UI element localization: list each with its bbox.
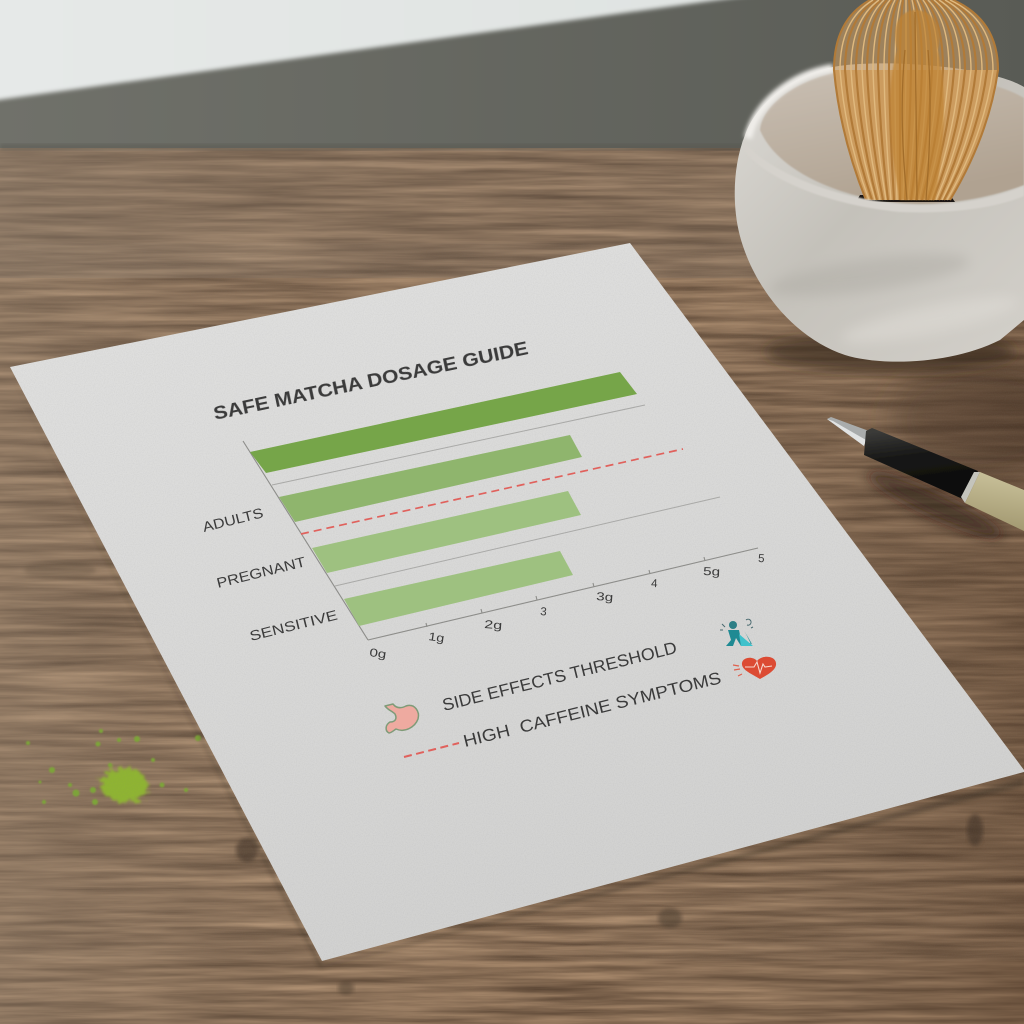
paper shadow xyxy=(8,372,1024,968)
row label: sensitive: SENSITIVE xyxy=(248,607,339,644)
bar: pregnant xyxy=(312,491,581,573)
axis tick labels: 3 xyxy=(540,606,547,619)
icon: dizzy person xyxy=(720,619,753,646)
matcha powder pile xyxy=(26,729,201,805)
legend text: side effects threshold: SIDE EFFECTS THRESHOLD xyxy=(440,638,679,715)
axis tick labels: 5 xyxy=(758,553,765,565)
axis tick labels: 2g xyxy=(484,619,503,632)
title: SAFE MATCHA DOSAGE GUIDE xyxy=(211,337,530,424)
icon: heart with pulse xyxy=(733,657,776,679)
bar: top reference bar xyxy=(250,372,637,473)
pen xyxy=(827,417,1024,548)
bar chart xyxy=(201,372,765,661)
axis tick labels: 4 xyxy=(651,578,658,590)
bowl exterior xyxy=(735,63,1024,362)
axis tick labels: 1g xyxy=(428,631,445,645)
rim highlight xyxy=(748,68,833,138)
whisk inner core xyxy=(890,10,944,200)
bamboo whisk xyxy=(743,0,1024,212)
bar: adults xyxy=(279,435,582,522)
axis tick labels xyxy=(369,553,765,661)
axis tick labels: 3g xyxy=(596,591,614,604)
matcha bowl xyxy=(735,0,1024,372)
axes xyxy=(243,441,758,640)
blurred wall background xyxy=(0,0,1024,150)
row label: adults: ADULTS xyxy=(201,504,265,535)
bowl rim in front of whisk xyxy=(743,140,1024,212)
legend xyxy=(385,619,776,757)
legend text: high caffeine symptoms: HIGH CAFFEINE SYMPTOMS xyxy=(461,668,723,751)
icon: stomach xyxy=(385,704,418,733)
row label: pregnant: PREGNANT xyxy=(215,553,308,591)
axis tick labels: 5g xyxy=(703,566,720,579)
legend dashed line xyxy=(404,743,459,757)
bar: sensitive xyxy=(344,551,573,626)
axis tick labels: 0g xyxy=(369,647,387,661)
grid lines xyxy=(272,405,720,586)
paper sheet xyxy=(10,243,1024,961)
threshold dashed line xyxy=(301,449,683,534)
bowl interior xyxy=(760,71,1024,204)
